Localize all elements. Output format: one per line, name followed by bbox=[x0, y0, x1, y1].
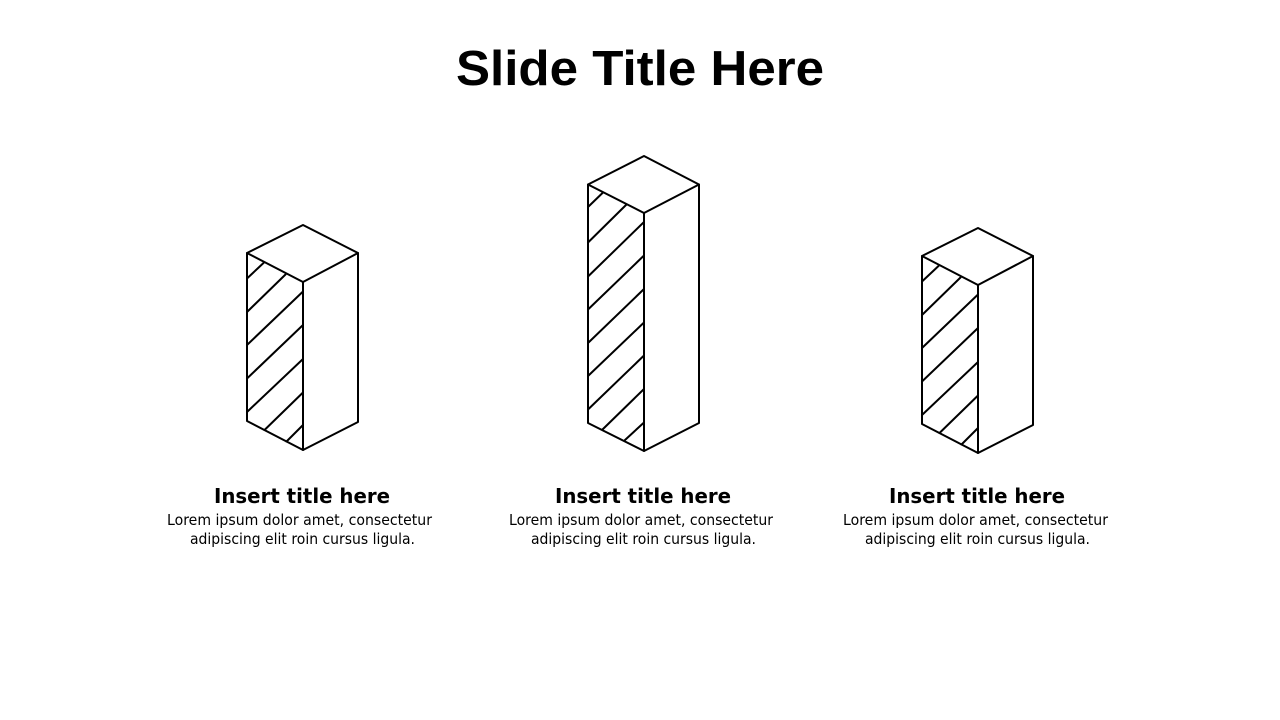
text block: right column bbox=[843, 511, 1109, 548]
icon: middle isometric bar bbox=[588, 156, 699, 451]
text block: left column: Lorem ipsum dolor amet, consectetur bbox=[167, 511, 433, 529]
text block: left column: adipiscing elit roin cursus ligula. bbox=[190, 530, 415, 548]
icon: right isometric bar bbox=[922, 228, 1033, 453]
text block: right column: adipiscing elit roin cursus ligula. bbox=[865, 530, 1090, 548]
text block: left column bbox=[167, 511, 433, 548]
panel: left column bbox=[167, 225, 433, 548]
title: Slide Title Here bbox=[456, 42, 824, 96]
icon: left isometric bar bbox=[247, 225, 358, 450]
text block: middle column: Lorem ipsum dolor amet, consectetur bbox=[509, 511, 774, 529]
panel: middle column bbox=[509, 156, 774, 548]
heading: right column: Insert title here bbox=[889, 484, 1065, 508]
heading: left column: Insert title here bbox=[214, 484, 390, 508]
text block: middle column: adipiscing elit roin cursus ligula. bbox=[531, 530, 756, 548]
heading: middle column: Insert title here bbox=[555, 484, 731, 508]
text block: right column: Lorem ipsum dolor amet, consectetur bbox=[843, 511, 1109, 529]
panel: right column bbox=[843, 228, 1109, 548]
text block: middle column bbox=[509, 511, 774, 548]
